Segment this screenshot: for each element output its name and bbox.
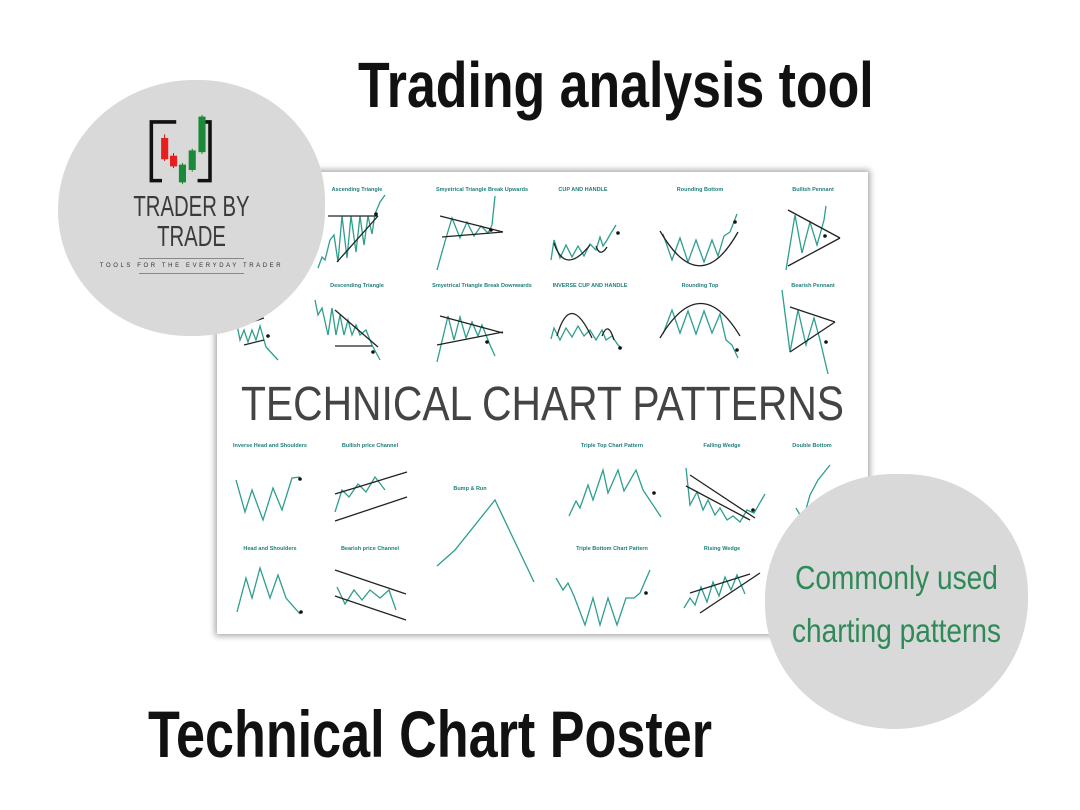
pattern labels: Triple Bottom Chart Pattern [576, 546, 649, 552]
pattern labels: Smyetrical Triangle Break Downwards [432, 283, 532, 289]
pattern labels: Rounding Bottom [677, 187, 723, 193]
logo text: TRADE [157, 221, 226, 253]
callout text [792, 559, 1001, 649]
pattern labels: CUP AND HANDLE [558, 187, 608, 193]
poster [217, 172, 868, 634]
pattern labels: Smyetrical Triangle Break Upwards [436, 187, 528, 193]
pattern labels: Bump & Run [453, 486, 487, 492]
pattern labels: Bullish Pennant [792, 187, 834, 193]
logo text [133, 191, 250, 253]
pattern drawings [236, 195, 840, 625]
pattern labels: Bearish Pennant [791, 283, 835, 289]
pattern labels: Rounding Top [682, 283, 719, 289]
pattern labels [233, 187, 835, 552]
callout circle [765, 474, 1028, 729]
pattern labels: Double Bottom [792, 443, 832, 449]
pattern labels: Rising Wedge [704, 546, 740, 552]
pattern labels: Triple Top Chart Pattern [581, 443, 644, 449]
pattern labels: Falling Wedge [703, 443, 741, 449]
logo circle [58, 80, 325, 336]
pattern labels: Bullish price Channel [342, 443, 399, 449]
callout text: Commonly used [795, 559, 998, 596]
pattern labels: Head and Shoulders [243, 546, 297, 552]
pattern labels: Inverse Head and Shoulders [233, 443, 307, 449]
logo text: TRADER BY [133, 191, 250, 223]
pattern labels: Bearish price Channel [341, 546, 400, 552]
pattern labels: Ascending Triangle [332, 187, 382, 193]
pattern labels: INVERSE CUP AND HANDLE [553, 283, 628, 289]
title: Trading analysis tool: Trading analysis tool [358, 49, 874, 121]
title: Technical Chart Poster: Technical Chart Poster [148, 697, 712, 771]
icon: candlestick logo [150, 114, 212, 184]
pattern labels: Descending Triangle [330, 283, 384, 289]
callout text: charting patterns [792, 612, 1001, 649]
tagline: TOOLS FOR THE EVERYDAY TRADER [100, 263, 283, 269]
